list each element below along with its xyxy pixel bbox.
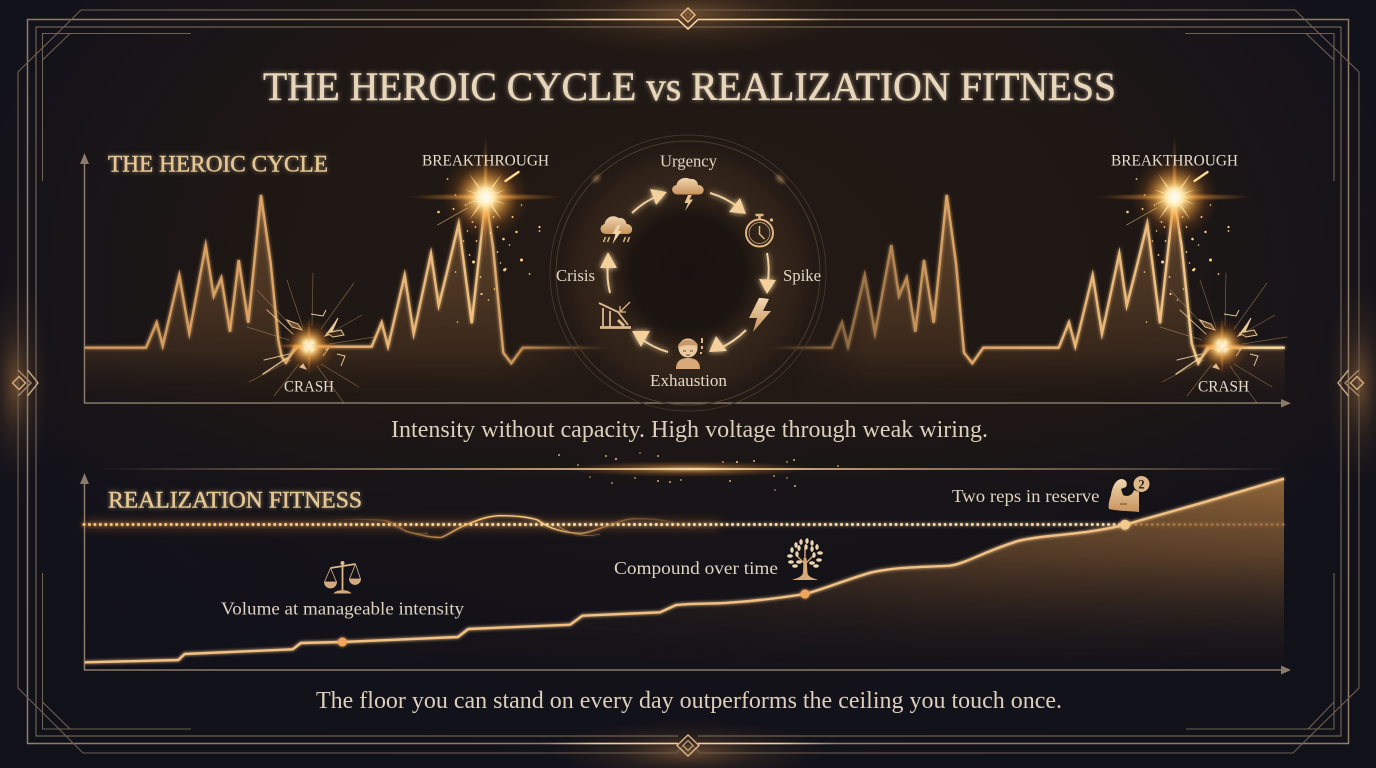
icon: exhausted person — [676, 338, 702, 369]
label: spike: Spike — [783, 266, 821, 285]
ceiling line glow — [84, 521, 720, 528]
area fill: left wave — [85, 206, 564, 382]
burst: breakthrough right — [1096, 135, 1252, 323]
cycle arrows — [600, 189, 776, 352]
panel: cycle diagram — [550, 135, 826, 411]
icon: flexed arm with 2 badge — [1109, 476, 1150, 512]
growth area fill — [662, 480, 1284, 648]
label: compound over time: Compound over time — [614, 558, 778, 578]
burst: breakthrough left — [408, 135, 564, 323]
growth line — [85, 479, 1284, 662]
ornament: right diamond — [1338, 370, 1364, 396]
heading: realization fitness: REALIZATION FITNESS — [108, 488, 362, 512]
wave line on ceiling — [334, 516, 697, 537]
divider with glow — [100, 452, 1290, 491]
label: exhaustion: Exhaustion — [650, 371, 727, 390]
label: crisis: Crisis — [556, 266, 595, 285]
arrow: crisis to urgency — [632, 189, 667, 213]
dotted ceiling line — [84, 523, 1284, 526]
label: breakthrough right: BREAKTHROUGH — [1111, 152, 1238, 170]
caption: realization fitness: The floor you can stand on every day outperforms the ceiling you touch once. — [316, 688, 1062, 714]
label: two reps in reserve: Two reps in reserve — [952, 486, 1100, 506]
area fill: right wave — [819, 206, 1285, 382]
label: breakthrough left: BREAKTHROUGH — [422, 152, 549, 170]
arrow: urgency to stopwatch — [710, 193, 746, 214]
marker: two reps — [1120, 520, 1130, 530]
icon: flexed arm with 2 badge: 2 — [1138, 478, 1145, 492]
arrow: crisis-chart to storm — [600, 252, 617, 293]
heading: the heroic cycle: THE HEROIC CYCLE — [108, 152, 328, 176]
heroic line: left — [85, 195, 610, 363]
icon: lightning bolt — [749, 298, 771, 332]
label: urgency: Urgency — [660, 152, 718, 170]
icon: stopwatch — [746, 215, 773, 246]
icon: urgency cloud with bolt — [672, 178, 704, 211]
panel: the heroic cycle chart — [80, 135, 1291, 408]
arrow: spike to exhaustion — [709, 330, 746, 352]
ornament: bottom diamond — [540, 735, 836, 756]
burst: crash left — [247, 273, 374, 403]
arrow: stopwatch to spike — [759, 253, 776, 294]
icon: storm cloud — [601, 216, 632, 244]
panel: realization fitness chart — [80, 473, 1291, 674]
label: volume at manageable intensity: Volume at manageable intensity — [221, 598, 464, 618]
icon: tree — [787, 538, 823, 580]
icon: balance scale — [324, 561, 360, 594]
chart axes — [80, 473, 1291, 674]
title: THE HEROIC CYCLE vs REALIZATION FITNESS — [263, 64, 1116, 109]
burst: crash right — [1160, 273, 1287, 403]
ornament: top diamond — [540, 8, 836, 29]
heroic line: right — [770, 195, 1285, 363]
arrow: exhaustion to crisis — [632, 331, 668, 352]
marker: manageable intensity — [338, 638, 347, 646]
chart axes — [80, 153, 1291, 408]
label: crash left: CRASH — [284, 378, 334, 396]
ornament: left diamond — [12, 370, 38, 396]
cycle rings — [550, 135, 826, 411]
marker: compound — [800, 590, 810, 598]
label: crash right: CRASH — [1198, 378, 1249, 396]
icon: collapsing chart — [599, 302, 631, 328]
caption: heroic cycle: Intensity without capacity. High voltage through weak wiring. — [391, 417, 988, 443]
